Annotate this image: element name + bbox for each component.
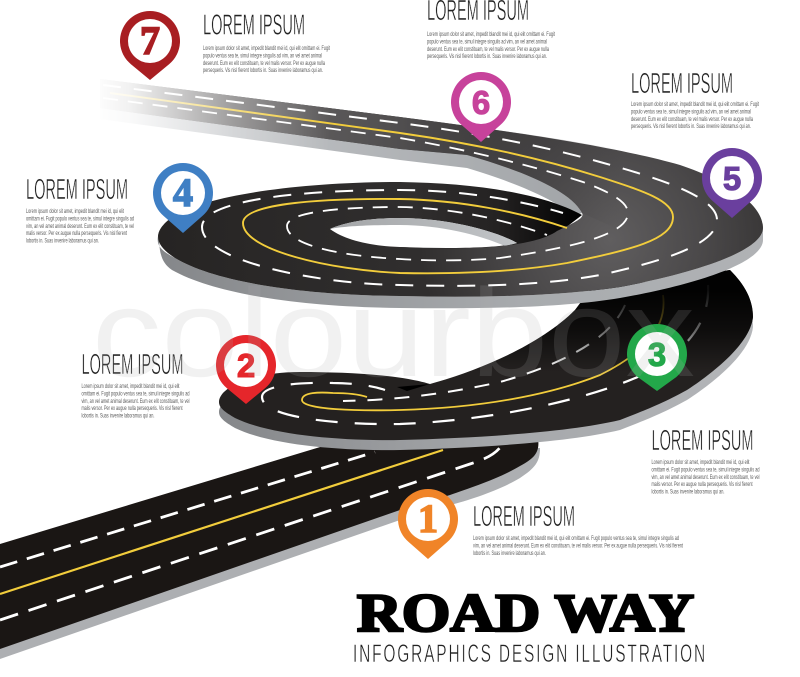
text block 4: LOREM IPSUM (26, 174, 128, 206)
text block 4: omittam ei. Fugit populo ventus sea te, simul integre singulis ad (26, 216, 134, 222)
pin 2: 2 (237, 347, 255, 384)
text block 2: vim, an vel amet animal deserunt. Eum ex elit constituam, te vel (82, 398, 190, 405)
text block 2 (82, 349, 190, 420)
text block 7: LOREM IPSUM (203, 10, 305, 42)
text block 5 (631, 68, 759, 130)
text block 3 (652, 425, 760, 496)
text block 6: Lorem ipsum dolor sit amet, impedit blandit mei id, qui elit omittam ei. Fugit (427, 31, 555, 38)
road segment 1: straight bottom road (0, 438, 540, 659)
text block 1 (473, 501, 683, 557)
pin 4: 4 (173, 170, 193, 215)
text block 2: lobortis in. Suas invenire laboramus qui an. (82, 412, 155, 420)
text block 6: populo ventus sea te, simul integre singulis ad vim, an vel amet animal (427, 38, 547, 46)
text block 7: deserunt. Eum ex elit constituam, te vel malis versor. Per ex augue nulla (203, 60, 325, 67)
text block 4: Lorem ipsum dolor sit amet, impedit blandit mei id, qui elit (26, 208, 124, 215)
pin 1: 1 (418, 496, 438, 541)
road segment 2-3: middle curved platform (219, 270, 753, 450)
pin 1 (398, 489, 458, 559)
pin 5: 5 (723, 160, 741, 197)
text block 3: lobortis in. Suas invenire laboramus qui an. (652, 488, 725, 496)
pin 4 (153, 163, 213, 233)
text block 4 (26, 174, 134, 244)
text block 1: Lorem ipsum dolor sit amet, impedit blandit mei id, qui elit omittam ei. Fugit populo ventus sea te, simul integre singulis ad (473, 535, 679, 542)
text block 4: malis versor. Per ex augue nulla persequeris. Vis nisl fierent (26, 230, 127, 237)
pin 5 (702, 148, 762, 218)
pin 7: 7 (140, 18, 160, 63)
text block 7 (203, 10, 330, 74)
pin 3: 3 (648, 336, 666, 373)
text block 1: LOREM IPSUM (473, 501, 575, 533)
subtitle: INFOGRAPHICS DESIGN ILLUSTRATION (353, 640, 705, 668)
road segment 4-7: top spiral road (90, 70, 763, 308)
text block 6: deserunt. Eum ex elit constituam, te vel malis versor. Per ex augue nulla (427, 46, 549, 53)
text block 2: LOREM IPSUM (82, 349, 184, 381)
pin 2 (216, 335, 276, 404)
pin 6 (451, 72, 511, 142)
text block 2: Lorem ipsum dolor sit amet, impedit blandit mei id, qui elit (82, 383, 180, 390)
text block 4: lobortis in. Suas invenire laboramus qui an. (26, 238, 99, 244)
title: ROAD WAY (357, 583, 694, 643)
text block 4: vim, an vel amet animal deserunt. Eum ex elit constituam, te vel (26, 223, 134, 230)
text block 1: lobortis in. Suas invenire laboramus qui an. (473, 550, 546, 557)
pin 7 (120, 11, 180, 80)
text block 2: omittam ei. Fugit populo ventus sea te, simul integre singulis ad (82, 390, 190, 398)
text block 7: Lorem ipsum dolor sit amet, impedit blandit mei id, qui elit omittam ei. Fugit (203, 45, 330, 52)
pin 6: 6 (472, 84, 490, 121)
watermark: colourbox (92, 264, 695, 403)
text block 6: persequeris. Vis nisl fierent lobortis in. Suas invenire laboramus qui an. (427, 53, 547, 60)
pin 3 (627, 324, 687, 391)
text block 6 (427, 0, 555, 60)
text block 7: populo ventus sea te, simul integre singulis ad vim, an vel amet animal (203, 52, 322, 60)
text block 2: malis versor. Per ex augue nulla persequeris. Vis nisl fierent (82, 405, 183, 412)
text block 7: persequeris. Vis nisl fierent lobortis in. Suas invenire laboramus qui an. (203, 67, 323, 74)
